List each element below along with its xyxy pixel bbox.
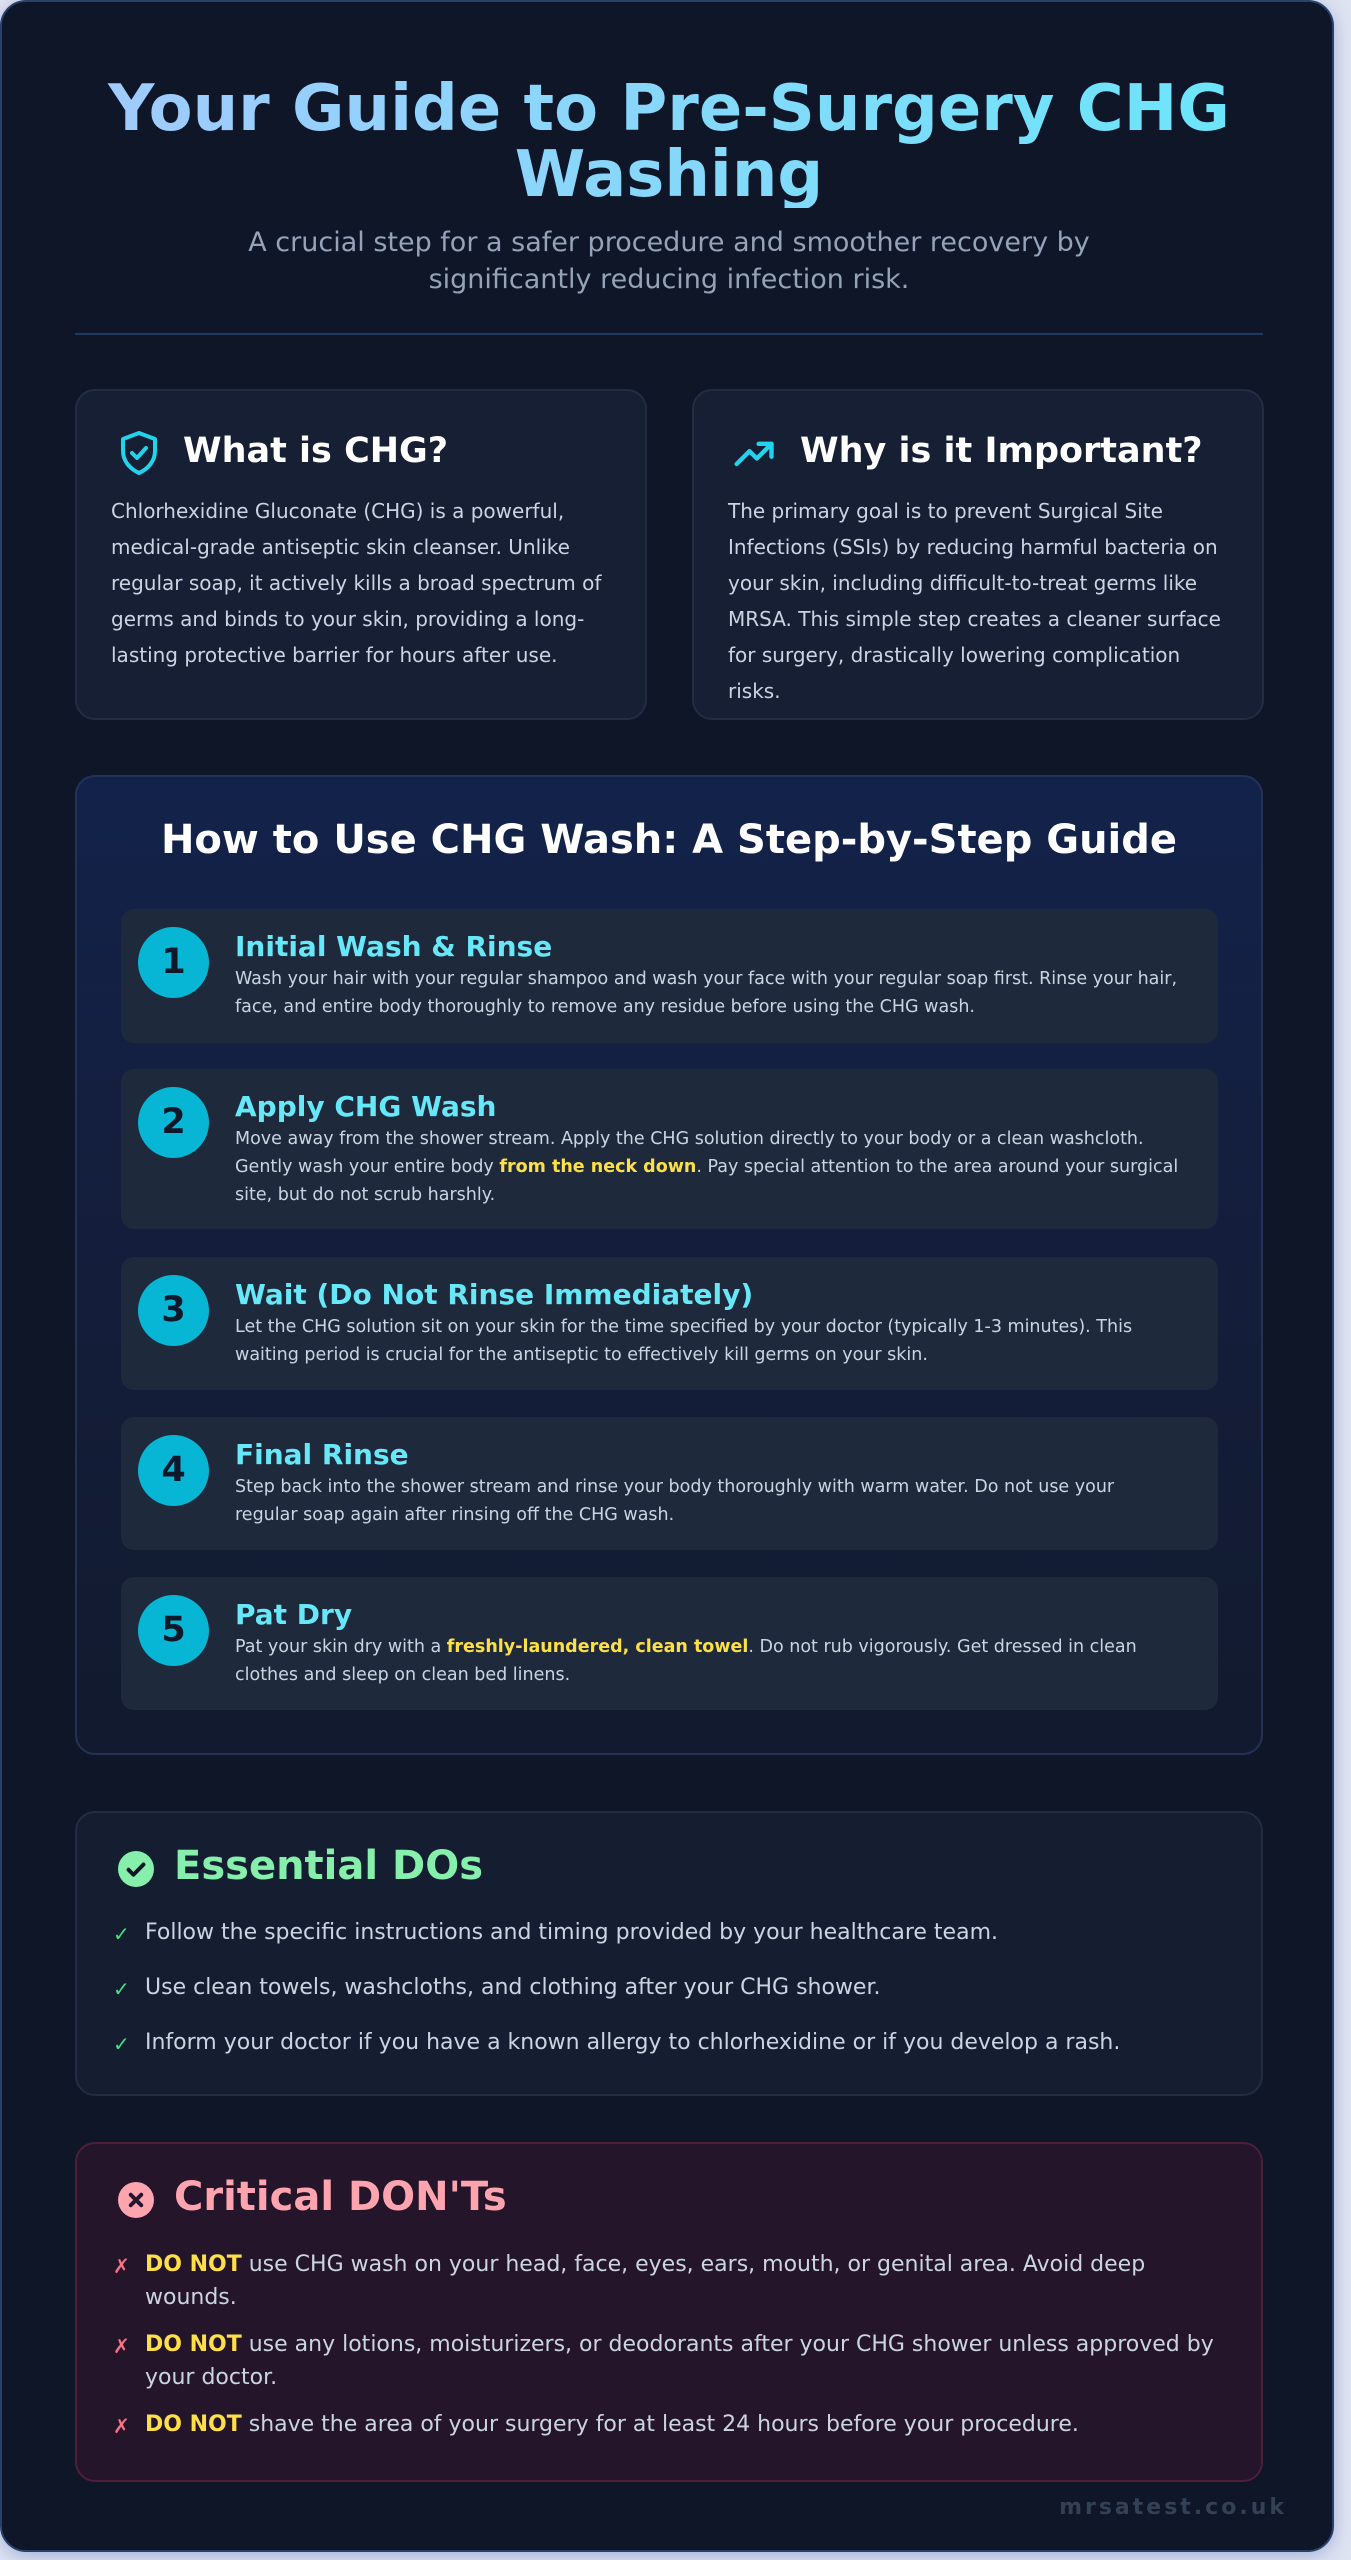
text block: for surgery, drastically lowering complication	[728, 643, 1180, 667]
step 3: Wait (Do Not Rinse Immediately)	[235, 1278, 753, 1311]
text block: Chlorhexidine Gluconate (CHG) is a powerful,	[111, 499, 564, 523]
step 5: Pat your skin dry with a freshly-laundered, clean towel. Do not rub vigorously. Get dressed in clean	[235, 1637, 1137, 1657]
list: ✓	[113, 2032, 130, 2056]
step 3: 3	[161, 1290, 186, 1330]
list: DO NOT shave the area of your surgery for at least 24 hours before your procedure.	[145, 2412, 1079, 2437]
step 4: 4	[161, 1450, 186, 1490]
step 1: face, and entire body thoroughly to remove any residue before using the CHG wash.	[235, 997, 975, 1017]
step 5	[121, 1577, 1218, 1710]
step 2: 2	[161, 1102, 186, 1142]
panel: why important	[692, 389, 1264, 720]
step 3: waiting period is crucial for the antiseptic to effectively kill germs on your skin.	[235, 1345, 928, 1365]
list: DO NOT use any lotions, moisturizers, or deodorants after your CHG shower unless approved by your doctor.	[145, 2332, 1214, 2390]
list	[113, 2252, 1214, 2438]
step 2: Gently wash your entire body from the neck down. Pay special attention to the area around your surgical	[235, 1157, 1178, 1177]
title	[2, 76, 1336, 208]
list: ✓	[113, 1922, 130, 1946]
text block: regular soap, it actively kills a broad spectrum of	[111, 571, 601, 595]
list: Follow the specific instructions and timing provided by your healthcare team.	[145, 1920, 998, 1945]
list: ✗	[113, 2254, 130, 2278]
list: ✓	[113, 1977, 130, 2001]
step 5: 5	[161, 1610, 186, 1650]
subtitle: significantly reducing infection risk.	[429, 264, 909, 295]
text block: your skin, including difficult-to-treat germs like	[728, 571, 1197, 595]
text block: risks.	[728, 679, 781, 703]
step 3	[121, 1257, 1218, 1390]
icon: x circle	[118, 2182, 154, 2218]
list: ✗	[113, 2414, 130, 2438]
text block: MRSA. This simple step creates a cleaner surface	[728, 607, 1221, 631]
step 5: Pat Dry	[235, 1598, 352, 1631]
title: Washing	[515, 138, 823, 212]
list: DO NOT use CHG wash on your head, face, eyes, ears, mouth, or genital area. Avoid deep wounds.	[145, 2252, 1145, 2310]
step 1: 1	[161, 942, 186, 982]
step 2: Move away from the shower stream. Apply the CHG solution directly to your body or a clean washcloth.	[235, 1129, 1144, 1149]
icon: check circle	[118, 1851, 154, 1887]
subtitle: A crucial step for a safer procedure and smoother recovery by	[248, 227, 1090, 258]
panel: what is CHG	[75, 389, 647, 720]
heading: Why is it Important?	[800, 431, 1203, 471]
heading: Critical DON'Ts	[174, 2174, 507, 2220]
step 2	[121, 1069, 1218, 1229]
heading: Essential DOs	[174, 1843, 483, 1889]
step 1: Initial Wash & Rinse	[235, 930, 552, 963]
text block: Infections (SSIs) by reducing harmful bacteria on	[728, 535, 1218, 559]
step 5: clothes and sleep on clean bed linens.	[235, 1665, 570, 1685]
step 4: Step back into the shower stream and rinse your body thoroughly with warm water. Do not use your	[235, 1477, 1114, 1497]
step 2: site, but do not scrub harshly.	[235, 1185, 495, 1205]
list: Inform your doctor if you have a known allergy to chlorhexidine or if you develop a rash.	[145, 2030, 1120, 2055]
step 4: regular soap again after rinsing off the CHG wash.	[235, 1505, 674, 1525]
icon: shield check	[121, 431, 157, 475]
subtitle	[248, 227, 1090, 295]
step 3: Let the CHG solution sit on your skin for the time specified by your doctor (typically 1-3 minutes). This	[235, 1317, 1132, 1337]
footer: mrsatest.co.uk	[1059, 2495, 1287, 2520]
heading: What is CHG?	[183, 431, 448, 471]
text block: lasting protective barrier for hours after use.	[111, 643, 557, 667]
list	[113, 1920, 1120, 2056]
list: ✗	[113, 2334, 130, 2358]
heading: How to Use CHG Wash: A Step-by-Step Guide	[161, 817, 1177, 863]
icon: trending up	[734, 442, 774, 466]
list: Use clean towels, washcloths, and clothing after your CHG shower.	[145, 1975, 880, 2000]
text block	[111, 499, 602, 667]
step 2: Apply CHG Wash	[235, 1090, 496, 1123]
panel: DOs	[75, 1811, 1263, 2096]
text block: medical-grade antiseptic skin cleanser. Unlike	[111, 535, 570, 559]
panel: DON'Ts	[75, 2142, 1263, 2482]
text block: germs and binds to your skin, providing a long-	[111, 607, 584, 631]
step 1: Wash your hair with your regular shampoo and wash your face with your regular soap first. Rinse your hair,	[235, 969, 1177, 989]
panel: steps	[75, 775, 1263, 1755]
title: Your Guide to Pre-Surgery CHG	[108, 72, 1230, 146]
text block: The primary goal is to prevent Surgical Site	[728, 499, 1163, 523]
text block	[728, 499, 1221, 703]
step 4	[121, 1417, 1218, 1550]
step 1	[121, 909, 1218, 1043]
step 4: Final Rinse	[235, 1438, 409, 1471]
